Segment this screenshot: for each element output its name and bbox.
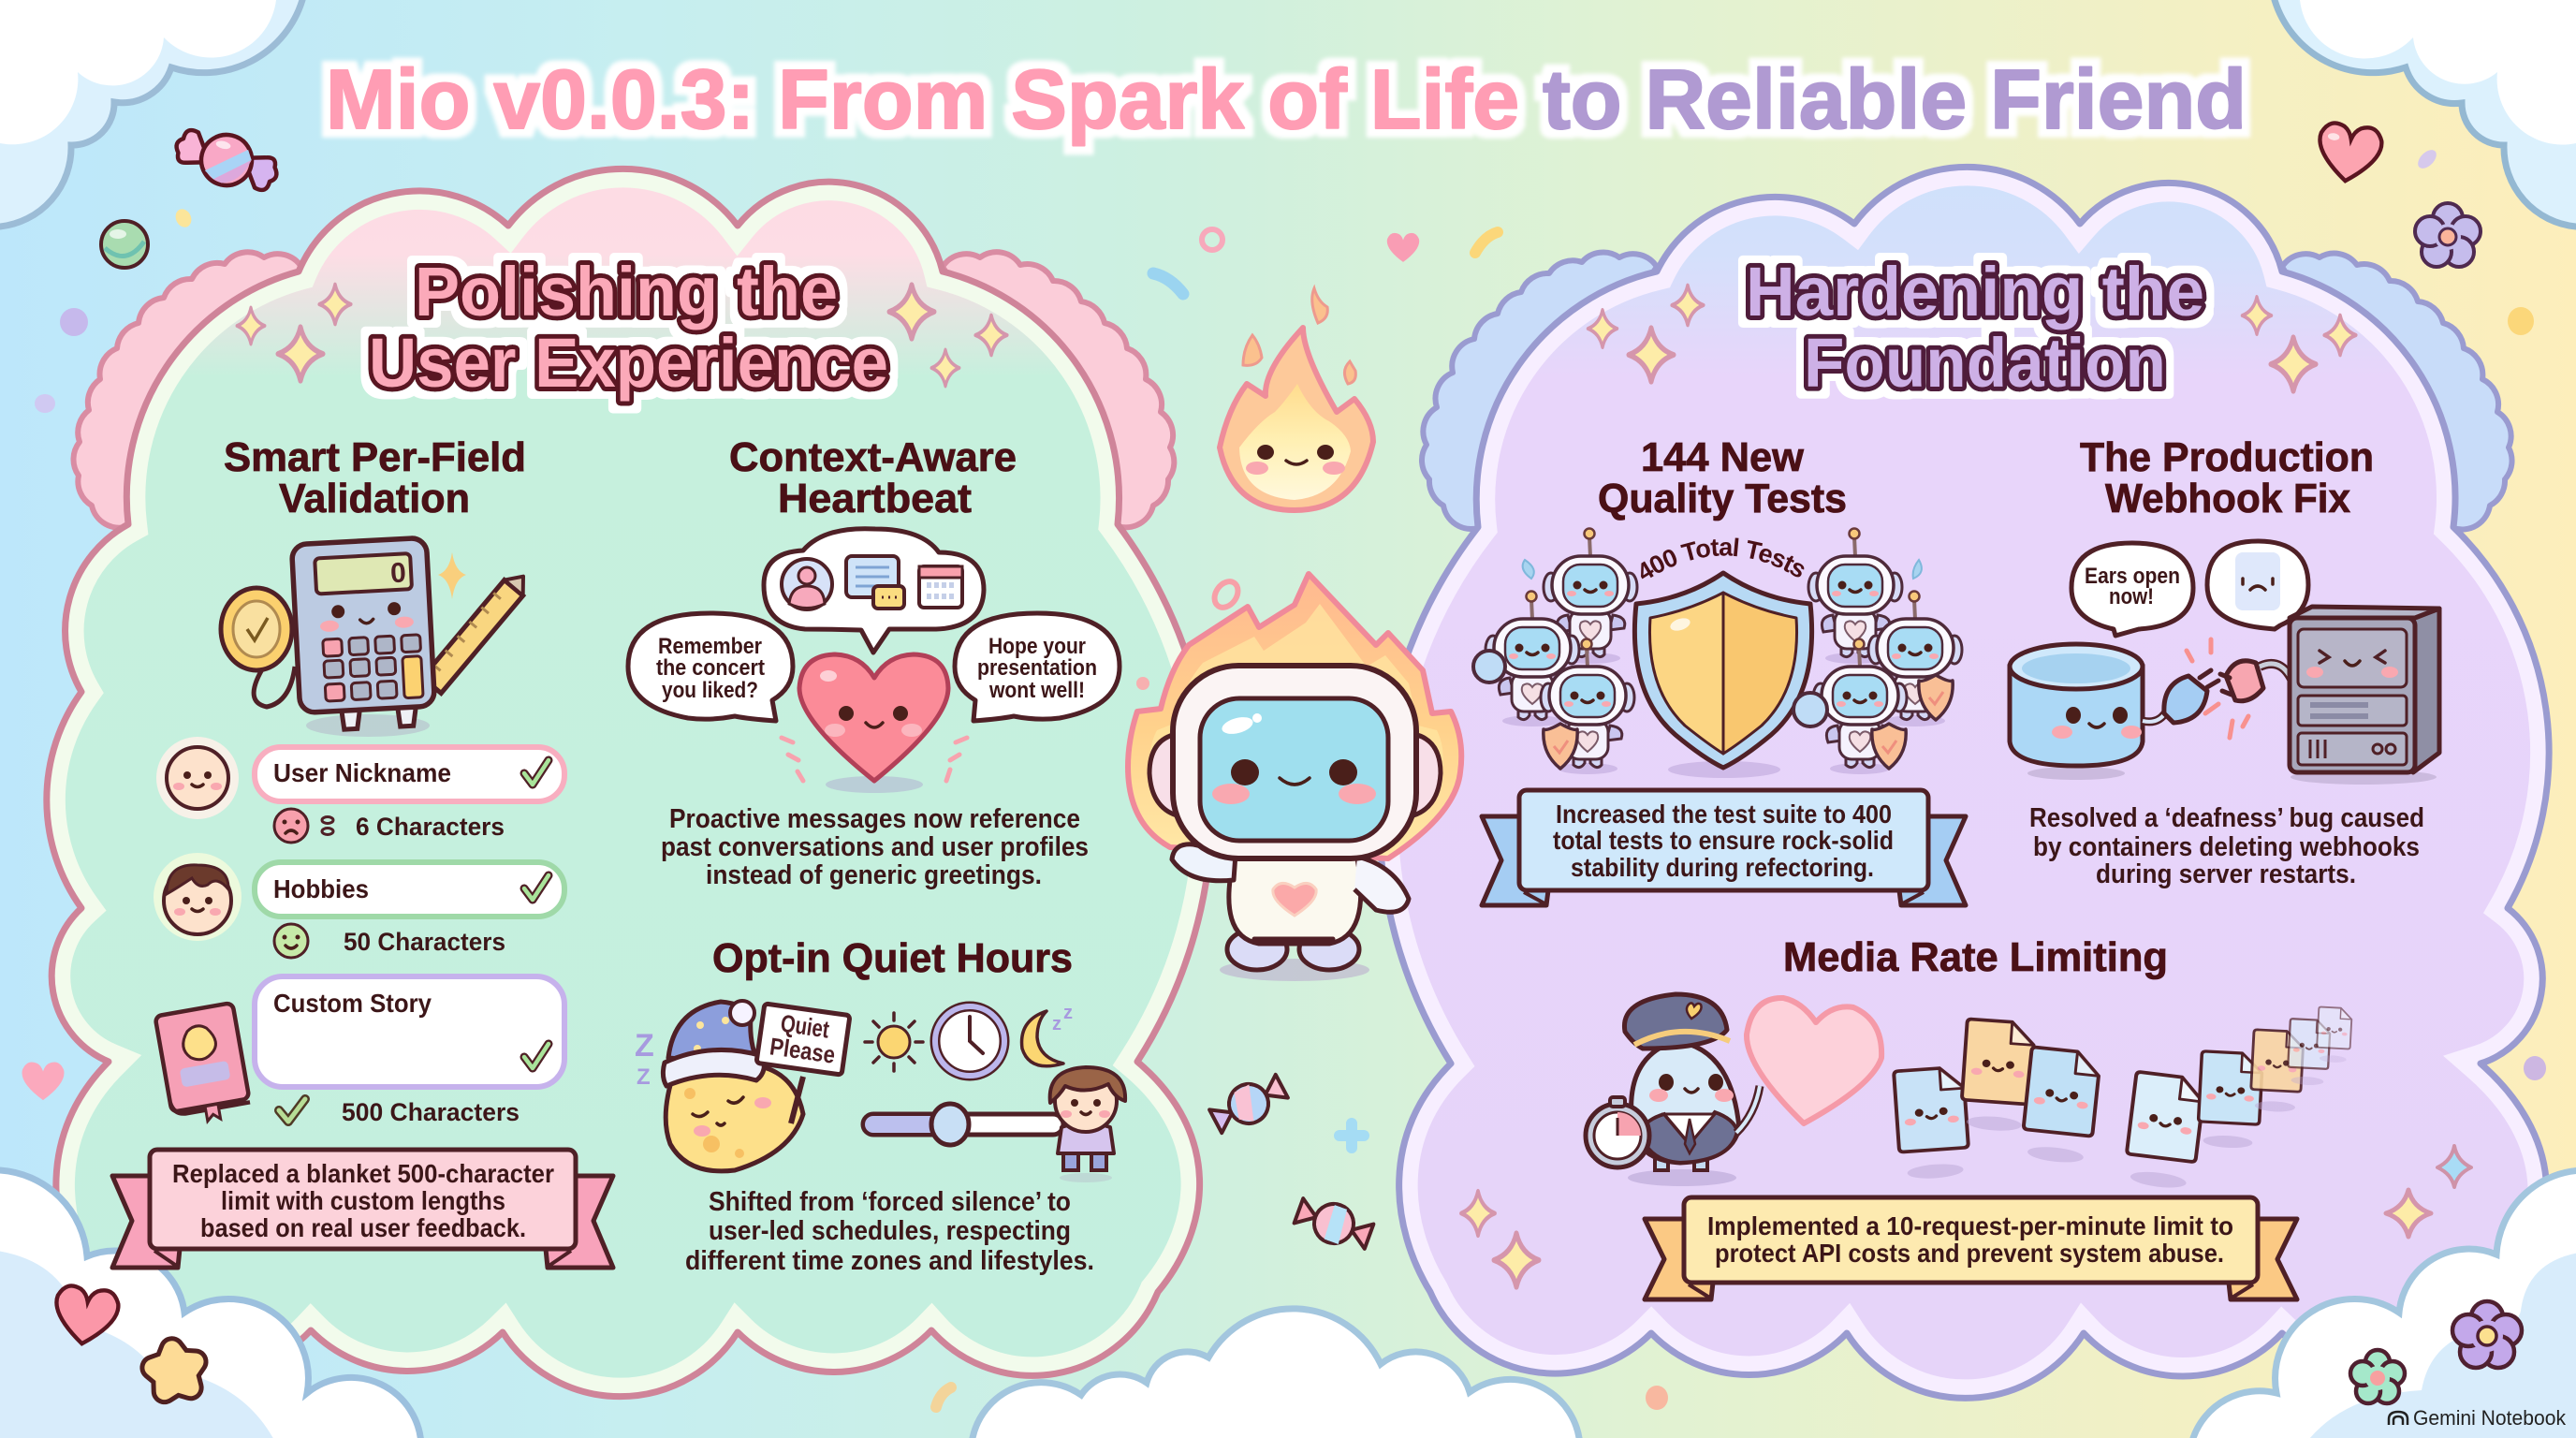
heading: The Production Webhook Fix: Webhook Fix: [2105, 476, 2351, 521]
text: heartbeat description: instead of generic greetings.: [706, 860, 1042, 890]
icon: small flame character: [1220, 288, 1373, 510]
heading: Context-Aware Heartbeat: Heartbeat: [778, 476, 972, 521]
icon: document queue: [1894, 1006, 2352, 1191]
ribbon: blue callout: stability during refectoring.: [1571, 853, 1874, 882]
speech bubble: hope your presentation: [955, 613, 1120, 721]
icon: smiling database drum: [2010, 644, 2170, 780]
speech bubble: remember the concert: you liked?: [662, 678, 758, 703]
icon: flower top right: [2415, 203, 2481, 267]
speech bubble: ears open now: [2071, 543, 2193, 636]
icon: smiling heart: [782, 654, 967, 793]
left section heading: [369, 253, 888, 402]
icon: traffic officer with stopwatch and heart: [1586, 994, 1881, 1186]
ribbon: yellow callout: protect API costs and prevent system abuse.: [1715, 1239, 2224, 1268]
ribbon: blue callout: [1482, 790, 1966, 905]
speech bubble: remember the concert: [628, 613, 793, 721]
icon: sleeping moon with sign: Z: [635, 1028, 654, 1064]
text: heartbeat description: [661, 804, 1089, 890]
panel: right background: [1379, 167, 2549, 1398]
text: quiet hours description: user-led schedules, respecting: [709, 1216, 1071, 1246]
ribbon: pink callout: [112, 1150, 613, 1268]
text: heartbeat description: past conversations and user profiles: [661, 832, 1089, 862]
heading: Smart Per-Field Validation: [224, 434, 526, 521]
field: User Nickname: User Nickname: [273, 758, 451, 787]
icon: boy: [1050, 1067, 1125, 1182]
icon: pink hearts: [22, 233, 1419, 1348]
field: Hobbies: Hobbies: [273, 874, 369, 903]
icon: sun, clock and crescent: z: [1063, 1003, 1073, 1023]
icon: shield with robots: [1473, 528, 1962, 778]
icon: sad server: [2290, 607, 2439, 785]
icon: bottom right flowers: [2350, 1301, 2522, 1403]
label: 50 Characters: 50 Characters: [344, 928, 505, 956]
heading: Opt-in Quiet Hours: Opt-in Quiet Hours: [712, 935, 1073, 981]
text: webhook description: during server restarts.: [2096, 859, 2356, 889]
sparkles: [237, 285, 2471, 1287]
speech bubble: hope your presentation: Hope your: [988, 634, 1086, 659]
label: 6 Characters: 6 Characters: [356, 813, 505, 841]
ribbon: blue callout: total tests to ensure rock-solid: [1553, 826, 1894, 855]
speech bubble: remember the concert: the concert: [656, 655, 765, 681]
ribbon: pink callout: Replaced a blanket 500-character: [172, 1159, 554, 1188]
speech bubble: hope your presentation: presentation: [977, 655, 1097, 681]
right section heading: Hardening the: [1746, 253, 2204, 330]
icon: calculator mascot with tape measure: [221, 537, 533, 737]
icon: candy top left: [170, 124, 283, 197]
ribbon: pink callout: based on real user feedback.: [200, 1213, 526, 1242]
icon: sleeping moon with sign: Quiet: [779, 1009, 831, 1044]
icon: sleeping moon with sign: Z: [637, 1064, 651, 1090]
label: 400 Total Tests arc: 400 Total Tests: [1641, 537, 1805, 579]
right section heading: Foundation: [1804, 324, 2166, 402]
heading: 144 New Quality Tests: 144 New: [1641, 434, 1805, 480]
heading: Context-Aware Heartbeat: Context-Aware: [729, 434, 1017, 480]
title: Mio v0.0.3: From Spark of Life to Reliable Friend: [326, 53, 2247, 147]
label: 50 Characters: [274, 924, 505, 958]
left panel frills: [73, 252, 1174, 528]
text: webhook description: by containers deleting webhooks: [2033, 832, 2420, 862]
text: webhook description: [2029, 803, 2424, 889]
field: Custom Story: [155, 976, 564, 1127]
left section heading: User Experience: [369, 324, 888, 402]
left section heading: Polishing the: [415, 253, 838, 330]
ribbon: pink callout: limit with custom lengths: [221, 1186, 505, 1215]
panel: left background: [47, 169, 1212, 1397]
field: User Nickname: [156, 737, 564, 819]
text: heartbeat description: Proactive messages now reference: [669, 804, 1080, 834]
icon: sleeping moon with sign: Please: [768, 1032, 837, 1069]
icon: heart top right: [2315, 121, 2384, 185]
right section heading: [1746, 253, 2204, 402]
field: Custom Story: Custom Story: [273, 989, 432, 1018]
icon: sleeping moon with sign: [635, 1001, 850, 1171]
label: 400 Total Tests arc: [1641, 537, 1805, 579]
icon: disconnected plug with sparks: [2164, 639, 2295, 738]
label: 500 Characters: 500 Characters: [342, 1098, 520, 1126]
ribbon: yellow callout: Implemented a 10-request-per-minute limit to: [1707, 1211, 2233, 1240]
icon: star bottom left: [151, 1346, 198, 1392]
icon: robot Mio with flame: [1128, 574, 1461, 981]
heading: The Production Webhook Fix: The Production: [2080, 434, 2374, 480]
heading: 144 New Quality Tests: Quality Tests: [1598, 476, 1847, 521]
icon: centre candies: [1207, 1069, 1376, 1255]
right panel frills: [1422, 253, 2512, 529]
speech bubble: hope your presentation: wont well!: [988, 678, 1085, 703]
icon: thought cloud with profile, chat and calendar: [764, 529, 984, 653]
heading: Context-Aware Heartbeat: [729, 434, 1017, 521]
icon: schedule slider: [863, 1104, 1063, 1145]
label: 6 Characters: [274, 809, 505, 843]
speech bubble: remember the concert: Remember: [658, 634, 762, 659]
watermark: Gemini Notebook: Gemini Notebook: [2413, 1406, 2567, 1430]
icon: sun, clock and crescent: z: [1052, 1014, 1061, 1034]
speech bubble: ears open now: now!: [2109, 584, 2154, 609]
heading: Media Rate Limiting: Media Rate Limiting: [1783, 934, 2168, 980]
heading: 144 New Quality Tests: [1598, 434, 1847, 521]
field: Hobbies: [154, 853, 564, 941]
text: quiet hours description: Shifted from ‘forced silence’ to: [709, 1187, 1071, 1217]
heading: The Production Webhook Fix: [2080, 434, 2374, 521]
text: webhook description: Resolved a ‘deafness’ bug caused: [2029, 803, 2424, 833]
text: quiet hours description: different time zones and lifestyles.: [685, 1246, 1094, 1276]
speech bubble: ears open now: Ears open: [2085, 564, 2180, 589]
text: quiet hours description: [685, 1187, 1094, 1276]
icon: sun, clock and crescent: [865, 1003, 1073, 1076]
ribbon: blue callout: Increased the test suite to 400: [1556, 800, 1892, 829]
heading: Smart Per-Field Validation: Smart Per-Field: [224, 434, 526, 480]
icon: calculator mascot with tape measure: 0: [389, 557, 407, 589]
icon: green marble: [101, 221, 148, 268]
speech bubble: sad face: [2207, 541, 2308, 629]
heading: Smart Per-Field Validation: Validation: [279, 476, 470, 521]
ribbon: yellow callout: [1645, 1197, 2297, 1299]
